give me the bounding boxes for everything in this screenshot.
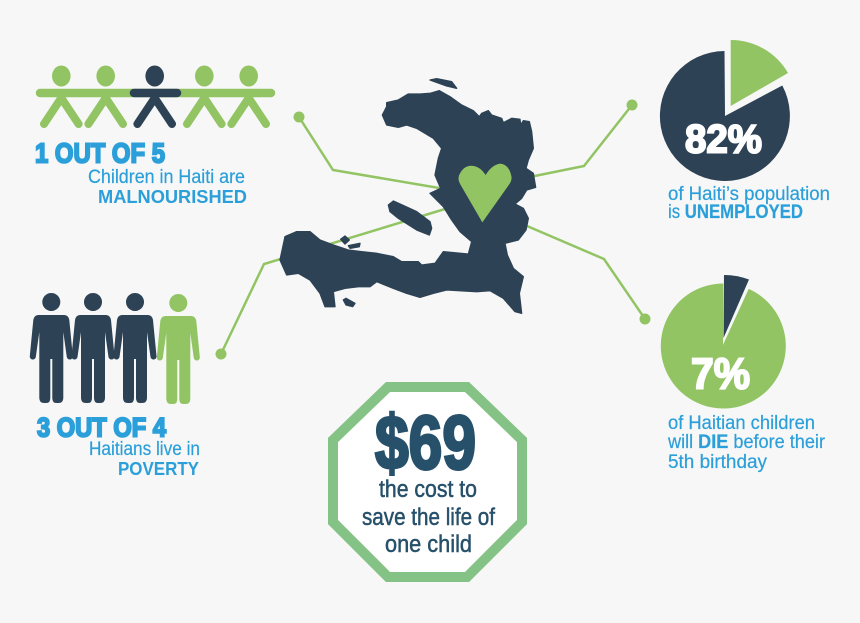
connector: unemployment to map <box>510 100 638 181</box>
text: is unemployed: is UNEMPLOYED <box>668 202 803 223</box>
icon: row of five children <box>40 66 271 124</box>
icon: four adults <box>30 293 200 404</box>
text: 5th birthday: 5th birthday <box>668 452 767 473</box>
heading: 1 out of 5: 1 OUT OF 5 <box>35 138 165 168</box>
text: will die before their: will DIE before their <box>667 432 826 453</box>
text: Haitians live in: Haitians live in <box>89 439 200 460</box>
heading: $69: $69 <box>375 401 476 486</box>
text: malnourished: MALNOURISHED <box>98 186 247 207</box>
text: save the life of: save the life of <box>362 504 495 531</box>
text: one child: one child <box>385 531 472 558</box>
text: of Haitian children: of Haitian children <box>668 413 815 434</box>
heading: 3 out of 4: 3 OUT OF 4 <box>37 412 166 442</box>
text: poverty: POVERTY <box>118 458 200 479</box>
connector: children to map <box>294 112 445 189</box>
connector: poverty to map <box>216 209 445 360</box>
label: 82%: 82% <box>685 118 762 162</box>
connector: child mortality to map <box>520 223 650 324</box>
text: children in Haiti are: Children in Haiti are <box>88 167 245 188</box>
map of Haiti <box>280 79 536 313</box>
text: the cost to: the cost to <box>379 476 477 503</box>
icon: heart <box>458 164 512 222</box>
panel: cost octagon <box>333 387 522 577</box>
chart: 7% pie <box>661 275 786 408</box>
text: of Haiti's population: of Haiti’s population <box>668 184 830 205</box>
label: 7%: 7% <box>691 350 750 398</box>
chart: 82% pie <box>660 40 790 181</box>
